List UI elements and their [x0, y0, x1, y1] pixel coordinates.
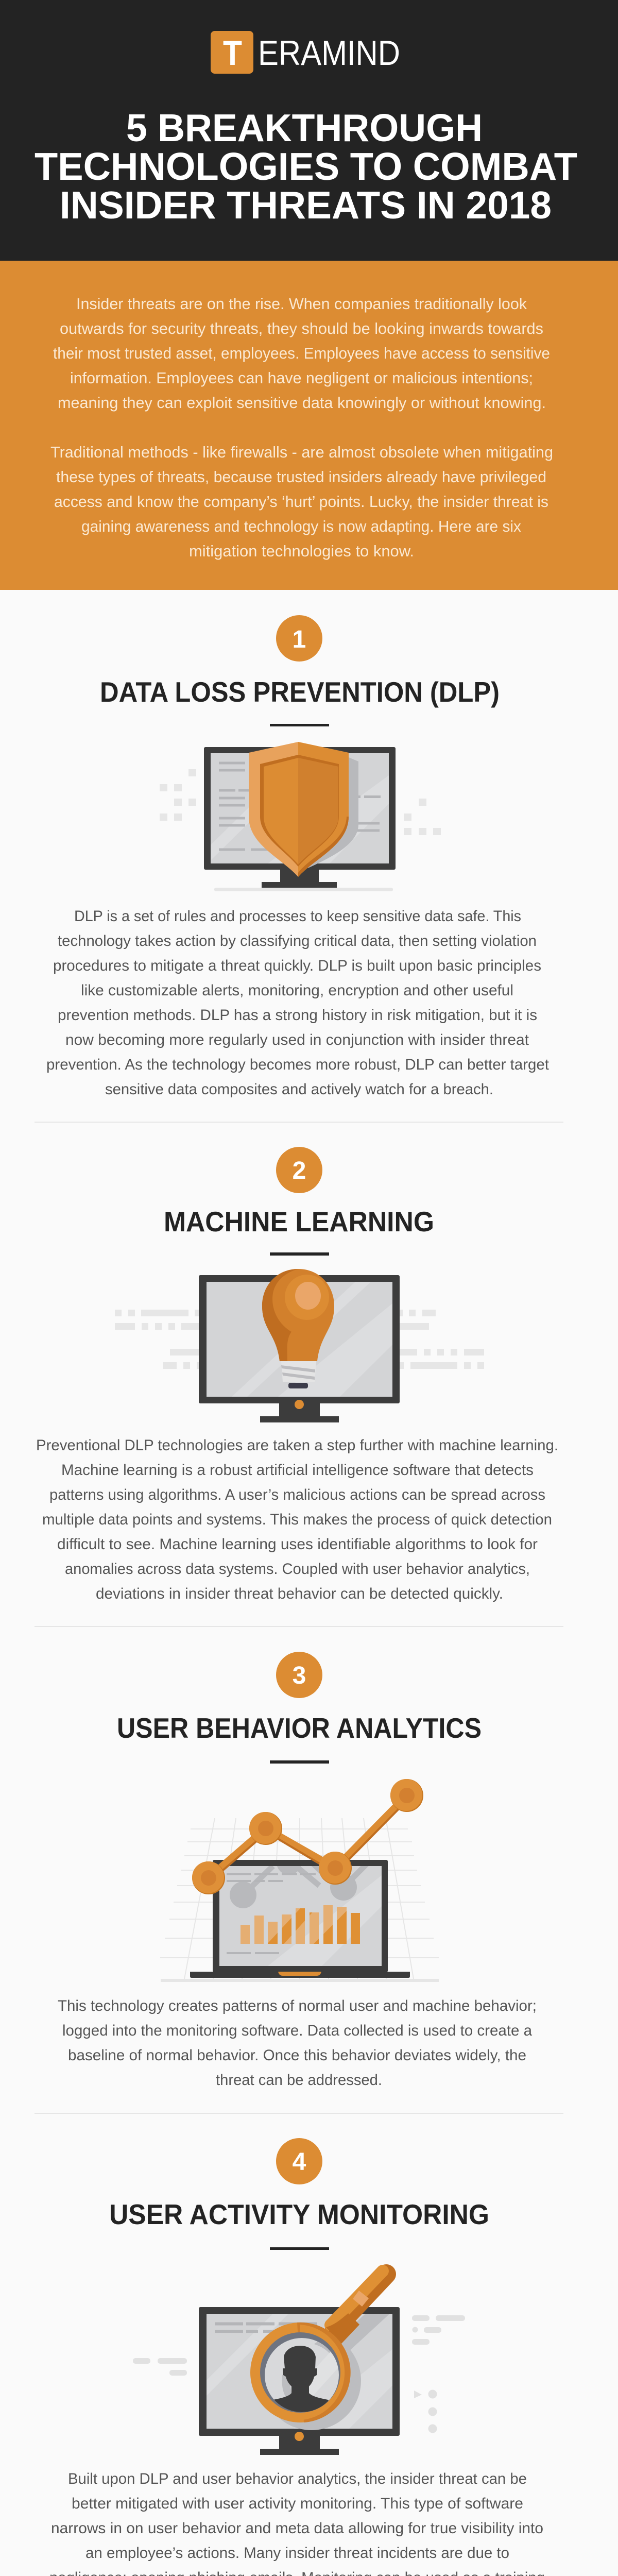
paragraph: baseline of normal behavior. Once this behavior deviates widely, the	[68, 2047, 526, 2064]
intro paragraph 1: information. Employees can have negligent or malicious intentions;	[70, 369, 533, 387]
intro paragraph 2	[50, 443, 553, 560]
intro paragraph 1: meaning they can exploit sensitive data knowingly or without knowing.	[58, 394, 546, 412]
number badge 2: 2	[293, 1157, 306, 1184]
paragraph: Built upon DLP and user behavior analytics, the insider threat can be	[68, 2470, 527, 2487]
illustration: monitor with shield	[160, 742, 441, 891]
intro paragraph 1: Insider threats are on the rise. When companies traditionally look	[76, 295, 527, 313]
title: 5 BREAKTHROUGH	[126, 106, 483, 149]
intro paragraph 2: these types of threats, because trusted insiders already have privileged	[56, 468, 546, 486]
logo: Teramind: ERAMIND	[258, 33, 400, 73]
paragraph: multiple data points and systems. This makes the process of quick detection	[42, 1511, 552, 1528]
title: TECHNOLOGIES TO COMBAT	[35, 145, 577, 188]
paragraph: anomalies across data systems. Coupled with user behavior analytics,	[65, 1561, 530, 1578]
number badge 4	[276, 2138, 322, 2184]
title	[35, 106, 577, 227]
paragraph: difficult to see. Machine learning uses identifiable algorithms to look for	[57, 1536, 538, 1553]
paragraph	[49, 2470, 545, 2576]
intro paragraph 1	[53, 295, 550, 412]
intro paragraph 2: gaining awareness and technology is now adapting. Here are six	[81, 517, 521, 535]
paragraph: Preventional DLP technologies are taken a step further with machine learning.	[36, 1437, 558, 1454]
paragraph: prevention methods. DLP has a strong history in risk mitigation, but it is	[58, 1007, 537, 1024]
section 4: user activity monitoring	[49, 2138, 545, 2576]
paragraph: now becoming more regularly used in conjunction with insider threat	[65, 1031, 529, 1048]
paragraph	[36, 1437, 558, 1602]
intro paragraph 2: Traditional methods - like firewalls - are almost obsolete when mitigating	[50, 443, 553, 461]
paragraph: sensitive data composites and actively watch for a breach.	[105, 1081, 493, 1098]
heading: USER BEHAVIOR ANALYTICS	[117, 1712, 482, 1744]
paragraph: DLP is a set of rules and processes to keep sensitive data safe. This	[74, 908, 521, 925]
paragraph: narrows in on user behavior and meta data allowing for true visibility into	[51, 2520, 543, 2537]
number badge 3	[276, 1652, 322, 1698]
header panel	[0, 0, 618, 261]
section 1: data loss prevention	[46, 615, 550, 1098]
paragraph	[46, 908, 550, 1098]
title: INSIDER THREATS IN 2018	[60, 183, 552, 227]
number badge 3: 3	[293, 1662, 306, 1689]
illustration: monitor with light bulb	[115, 1269, 484, 1422]
paragraph: technology takes action by classifying critical data, then setting violation	[58, 933, 537, 950]
section 2: machine learning	[36, 1147, 558, 1602]
intro paragraph 2: access and know the company’s ‘hurt’ points. Lucky, the insider threat is	[54, 493, 548, 511]
illustration: laptop with line chart	[160, 1779, 439, 1982]
paragraph: better mitigated with user activity monitoring. This type of software	[72, 2495, 523, 2512]
paragraph: threat can be addressed.	[216, 2072, 382, 2089]
paragraph: logged into the monitoring software. Data collected is used to create a	[62, 2022, 532, 2039]
heading: USER ACTIVITY MONITORING	[109, 2198, 489, 2230]
heading: DATA LOSS PREVENTION (DLP)	[100, 676, 500, 708]
number badge 1	[276, 615, 322, 662]
paragraph: an employee’s actions. Many insider threat incidents are due to	[85, 2545, 509, 2562]
number badge 1: 1	[293, 626, 306, 653]
paragraph: procedures to mitigate a threat quickly. DLP is built upon basic principles	[53, 957, 541, 974]
bar chart	[241, 1905, 360, 1944]
heading: MACHINE LEARNING	[164, 1206, 434, 1238]
paragraph: prevention. As the technology becomes more robust, DLP can better target	[46, 1056, 550, 1073]
intro paragraph 1: their most trusted asset, employees. Employees have access to sensitive	[53, 344, 550, 362]
line chart points	[192, 1779, 423, 1894]
intro paragraph 2: mitigation technologies to know.	[189, 542, 414, 560]
logo: Teramind: T	[223, 33, 242, 73]
logo: Teramind	[211, 31, 400, 74]
number badge 4: 4	[293, 2148, 306, 2176]
paragraph: This technology creates patterns of normal user and machine behavior;	[58, 1997, 537, 2014]
paragraph: deviations in insider threat behavior can be detected quickly.	[96, 1585, 503, 1602]
section 3: user behavior analytics	[58, 1652, 537, 2089]
intro paragraph 1: outwards for security threats, they should be looking inwards towards	[60, 319, 543, 337]
paragraph: patterns using algorithms. A user’s malicious actions can be spread across	[49, 1486, 545, 1503]
intro panel	[0, 261, 618, 590]
paragraph: Machine learning is a robust artificial intelligence software that detects	[61, 1462, 534, 1479]
icon: person silhouette	[274, 2346, 329, 2412]
number badge 2	[276, 1147, 322, 1193]
illustration: monitor with magnifier	[133, 2271, 465, 2455]
paragraph	[58, 1997, 537, 2089]
paragraph: like customizable alerts, monitoring, encryption and other useful	[81, 982, 513, 999]
